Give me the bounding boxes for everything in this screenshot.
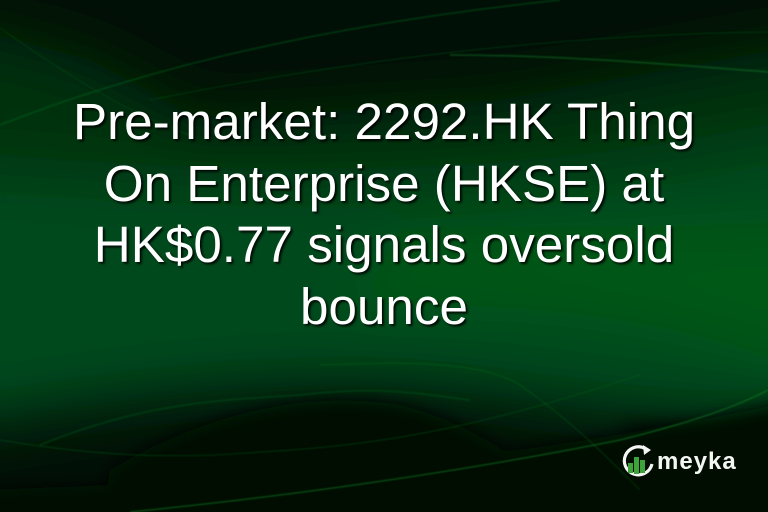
logo: meyka bbox=[622, 445, 737, 476]
title bbox=[73, 93, 695, 335]
title: HK$0.77 signals oversold bbox=[94, 216, 674, 273]
title: Pre-market: 2292.HK Thing bbox=[73, 93, 695, 150]
title: bounce bbox=[300, 278, 468, 335]
title: On Enterprise (HKSE) at bbox=[104, 155, 664, 212]
wordmark: meyka bbox=[657, 448, 737, 475]
icon: circular arrow with green bars bbox=[622, 445, 654, 476]
